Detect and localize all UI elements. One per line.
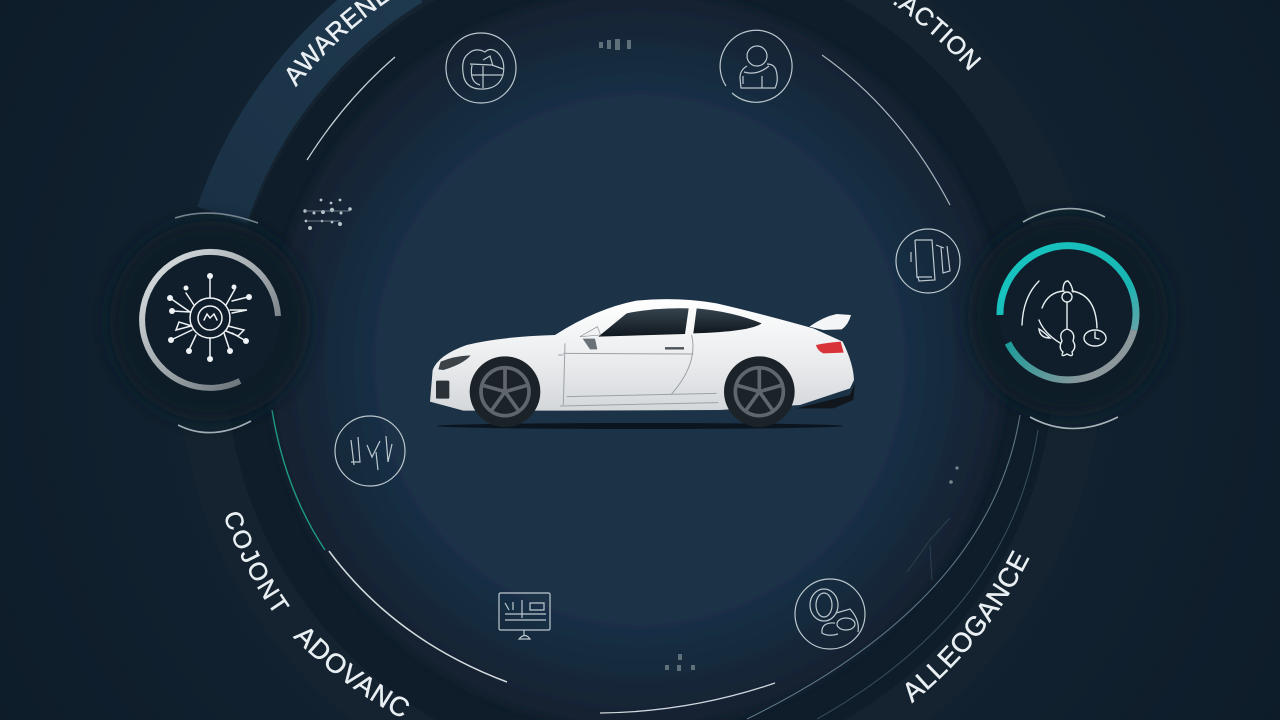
rear window [693,308,762,333]
door handle [665,345,684,352]
panel: awareness band [222,0,409,215]
icon: bottom dots [665,654,695,671]
arc: lower right outer [817,430,1038,719]
icon: molecule cluster [303,199,352,230]
icon: brain circle [446,33,516,103]
car body [430,299,854,411]
arc: upper left [307,57,395,160]
icon: left network hub [167,273,252,362]
label: allegiance: ALLEOGANCE [906,550,1030,704]
inner circle [269,0,1005,720]
rear underbody [797,383,855,408]
tail light [816,342,844,353]
node: right halo and ring [968,209,1168,428]
arc: bottom [600,683,775,713]
arc: lower left [329,551,507,682]
spoiler [809,314,851,330]
icon: chat circle [795,579,865,649]
node: left halo and ring [110,213,310,433]
faint circuit line [907,518,950,580]
front intake [436,381,449,399]
icon: lower left circle [335,416,405,486]
car [430,299,855,429]
headlight [438,355,471,370]
arc: lower right inner [747,415,1020,719]
mirror [580,327,601,337]
mirror streak [583,339,597,349]
icon: top dots [599,39,631,50]
icon: monitor [499,593,550,639]
door lines [558,335,718,406]
arc: upper right [822,55,950,205]
inner dark ring [226,0,1054,720]
icon: person circle [720,30,792,102]
car shadow [437,423,843,429]
arc: teal lower left [272,410,325,550]
label: cojont: COJONT [226,512,290,611]
rear wheel [724,356,795,427]
icon: documents circle [896,229,960,293]
outer ring band [178,0,1102,720]
front window [598,308,689,337]
icon: right loyalty cycle [1022,281,1106,356]
icon: right dots [949,466,959,484]
front wheel [470,356,540,427]
